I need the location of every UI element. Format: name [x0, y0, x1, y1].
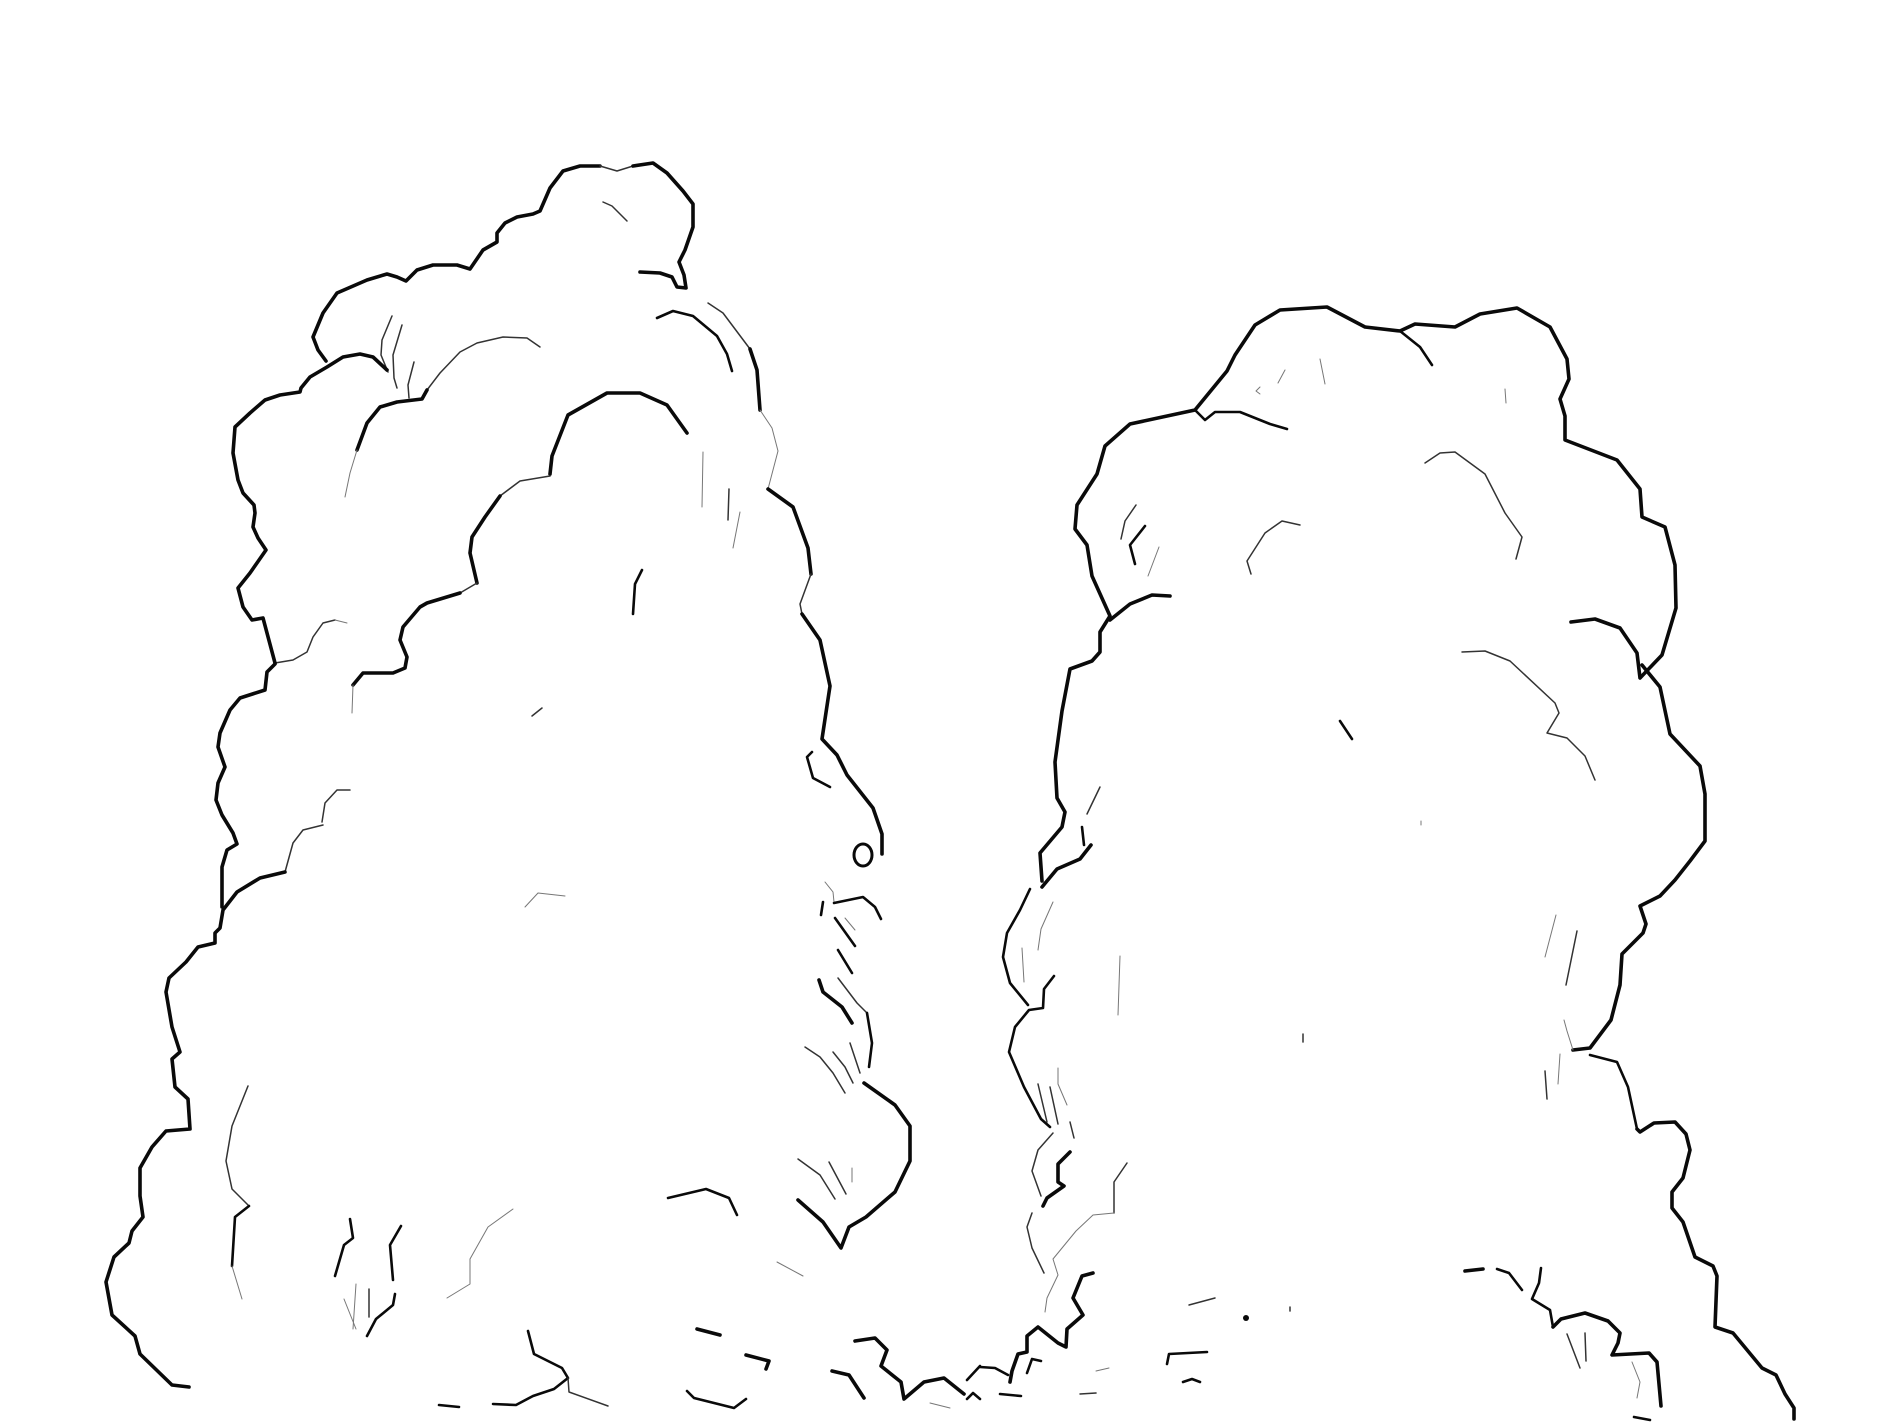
- left cloud: base marks: [335, 1189, 980, 1408]
- right cloud: base marks: [980, 1268, 1661, 1420]
- left cloud: [106, 163, 980, 1408]
- right cloud: left outline lower: [1003, 787, 1127, 1312]
- left cloud: right outline: [708, 303, 910, 1248]
- left cloud: top outline: [313, 163, 732, 371]
- right cloud: [980, 307, 1794, 1420]
- right cloud: top and side outline: [1040, 307, 1794, 1419]
- right cloud: inner billow lines: [1110, 331, 1595, 1099]
- left cloud: inner billow lines: [226, 316, 740, 1299]
- left cloud: left outline: [106, 354, 387, 1387]
